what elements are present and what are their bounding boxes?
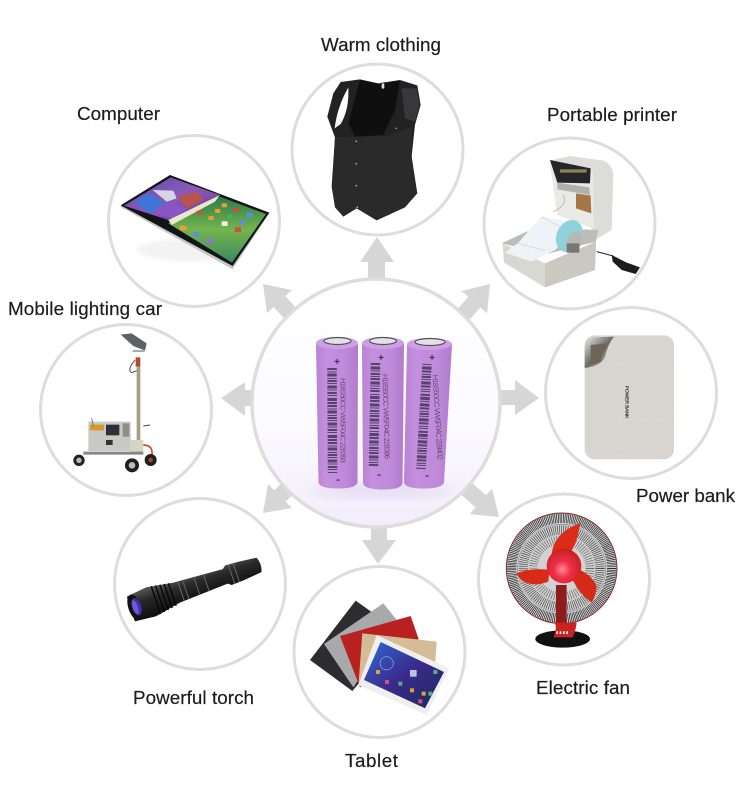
panel: power bank <box>546 308 736 506</box>
label: Tablet <box>345 750 399 771</box>
label: Mobile lighting car <box>8 298 162 319</box>
central circle <box>252 279 500 527</box>
battery 2 <box>362 337 404 490</box>
battery 2: + <box>378 353 384 364</box>
arrow: lower right <box>450 471 510 530</box>
panel: mobile lighting car <box>8 298 212 496</box>
icon: lighting tower cart <box>73 333 157 472</box>
battery 1 <box>316 337 358 488</box>
panel: tablet <box>294 566 465 771</box>
panel: computer <box>77 103 280 306</box>
soft shadow under batteries <box>310 483 454 497</box>
icon: group of tablets <box>310 601 449 715</box>
arrow: lower left <box>251 466 310 525</box>
label: Powerful torch <box>133 687 254 708</box>
arrow: upper left <box>251 272 310 332</box>
circle <box>546 308 716 478</box>
circle <box>478 494 650 665</box>
icon: tablet computer <box>120 175 269 269</box>
panel: central batteries <box>252 279 500 527</box>
panel: powerful torch <box>114 498 286 708</box>
label: Power bank <box>636 485 736 506</box>
label: Computer <box>77 103 160 124</box>
circle <box>294 566 465 738</box>
battery 3 <box>404 338 452 488</box>
icon: power bank: POWER BANK <box>624 386 630 419</box>
battery 3: H18S50CC VW5F04C 228402 <box>431 375 445 460</box>
icon: label printer <box>502 156 640 287</box>
circle <box>108 136 280 306</box>
arrows: from batteries to the applications <box>221 237 539 564</box>
circle <box>484 138 655 309</box>
label: Electric fan <box>536 677 630 698</box>
panel: warm clothing <box>292 34 463 235</box>
battery 1: H18S50CC VW5F04C 228393 <box>338 378 348 463</box>
icon: power bank <box>585 335 674 459</box>
icon: red desk fan <box>506 513 617 648</box>
arrow: upper right <box>444 273 503 333</box>
label: Warm clothing <box>321 34 441 55</box>
icon: black vest <box>327 79 421 220</box>
panel: portable printer <box>484 104 677 309</box>
arrow: down <box>362 520 396 564</box>
battery 3: + <box>429 353 435 364</box>
arrow: right <box>495 380 539 415</box>
battery 2: H18S50CC VW5F04C 228386 <box>381 374 392 459</box>
arrow: left <box>221 382 258 416</box>
battery 1: + <box>334 357 340 368</box>
arrow: up <box>360 237 394 285</box>
label: Portable printer <box>547 104 677 125</box>
circle <box>40 324 212 496</box>
panel: electric fan <box>478 494 650 698</box>
icon: flashlight <box>124 550 266 624</box>
circle <box>114 498 286 670</box>
circle <box>292 64 463 235</box>
